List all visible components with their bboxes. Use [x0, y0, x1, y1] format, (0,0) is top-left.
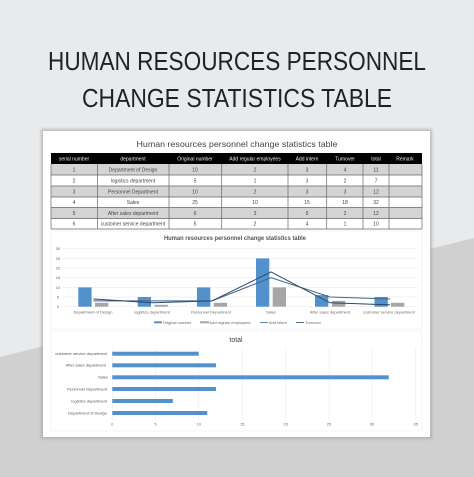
value axis labels: 35 — [413, 422, 419, 426]
table rows: 2 — [73, 178, 76, 184]
value axis labels — [111, 422, 419, 426]
background diagonal panel — [0, 238, 474, 477]
table rows: 10 — [373, 222, 379, 228]
x axis labels — [74, 310, 416, 314]
category labels: After sales department — [66, 363, 107, 368]
y axis labels: 5 — [57, 294, 60, 300]
category labels — [55, 351, 108, 415]
legend — [154, 320, 322, 325]
table header: Remark — [396, 156, 414, 162]
table header: Add intern — [296, 156, 319, 162]
paper shadow — [41, 129, 432, 439]
title: HUMAN RESOURCES PERSONNEL — [48, 46, 426, 76]
table rows: Personnel Department — [108, 190, 159, 196]
bars: add regular employees — [95, 287, 404, 307]
table rows: 6 — [194, 211, 197, 217]
value axis labels: 5 — [154, 422, 157, 426]
table rows: 11 — [373, 168, 379, 174]
table rows: 2 — [254, 168, 257, 174]
table rows: 2 — [344, 178, 347, 184]
total bar chart — [51, 331, 422, 431]
table header: department — [120, 156, 146, 162]
legend: Turnover — [305, 320, 322, 325]
y axis labels: 10 — [56, 285, 61, 290]
legend: Add intern — [269, 320, 287, 325]
x axis labels: customer service department — [363, 310, 416, 314]
value axis labels: 10 — [196, 422, 202, 426]
title — [48, 46, 426, 113]
table header — [59, 156, 414, 162]
table rows: 7 — [375, 178, 378, 184]
category labels: customer service department — [55, 351, 108, 356]
table rows: 5 — [194, 222, 197, 228]
spreadsheet sheet — [43, 131, 430, 437]
table rows: 3 — [306, 178, 309, 184]
value axis labels: 25 — [327, 422, 332, 426]
table rows: 1 — [73, 168, 76, 174]
y axis labels: 30 — [56, 246, 61, 251]
x axis labels: After sales department — [310, 310, 351, 314]
x axis labels: Personnel Department — [191, 310, 232, 314]
data table — [51, 153, 422, 229]
table rows: 3 — [306, 190, 309, 196]
line: turnover — [94, 272, 390, 305]
table rows — [73, 168, 379, 228]
combo chart — [51, 231, 422, 329]
category labels: Personnel Department — [67, 386, 108, 391]
table rows: 25 — [192, 200, 198, 206]
table rows: 3 — [306, 168, 309, 174]
table rows: 3 — [254, 211, 257, 217]
value axis labels: 20 — [283, 422, 289, 426]
horizontal bars — [112, 352, 389, 415]
category labels: Department of Design — [68, 410, 107, 415]
total chart title: total — [229, 337, 243, 344]
x axis labels: logistics department — [134, 310, 171, 314]
table rows: 4 — [344, 168, 347, 174]
y axis labels: 0 — [57, 304, 60, 309]
table rows: 2 — [254, 190, 257, 196]
table rows: 10 — [192, 190, 198, 196]
y axis labels: 20 — [56, 266, 61, 270]
table rows: 5 — [73, 211, 76, 217]
table rows: 5 — [194, 178, 197, 184]
table header: Original number — [177, 156, 213, 162]
table rows: 1 — [254, 178, 257, 184]
value axis labels: 30 — [370, 422, 375, 426]
table rows: customer service department — [101, 222, 166, 228]
value axis labels: 0 — [111, 422, 114, 426]
table rows: Sales — [127, 200, 140, 206]
table rows: 6 — [73, 222, 76, 228]
table rows: 12 — [373, 190, 379, 196]
x axis labels: Sales — [266, 310, 276, 314]
table rows: Department of Design — [109, 168, 158, 174]
table rows: 5 — [306, 211, 309, 217]
table header: Add regular employees — [229, 156, 281, 162]
bars: original number — [78, 258, 388, 307]
y axis labels: 25 — [56, 256, 61, 261]
table rows: 3 — [344, 190, 347, 196]
category labels: Sales — [98, 375, 108, 380]
table header: serial number — [59, 156, 89, 162]
table rows: 3 — [73, 190, 76, 196]
table rows: logistics department — [111, 178, 156, 184]
category labels: logistics department — [71, 398, 108, 403]
legend: Add regular employees — [209, 320, 251, 325]
table rows: 15 — [304, 200, 310, 206]
table header: Turnover — [335, 156, 355, 162]
line: add intern — [94, 278, 390, 301]
y axis labels — [56, 246, 61, 309]
table rows: 4 — [306, 222, 309, 228]
table rows: 2 — [344, 211, 347, 217]
combo chart title: Human resources personnel change statistics table — [164, 235, 306, 242]
value axis labels: 15 — [240, 422, 245, 426]
table header: total — [371, 156, 381, 162]
table rows: 4 — [73, 200, 76, 206]
legend: Original number — [163, 320, 192, 325]
y axis labels: 15 — [56, 275, 61, 280]
sheet heading: Human resources personnel change statistics table — [136, 139, 338, 149]
table rows: 18 — [342, 200, 348, 206]
table rows: 2 — [254, 222, 257, 228]
x axis labels: Department of Design — [74, 310, 112, 314]
table rows: 1 — [344, 222, 347, 228]
title: CHANGE STATISTICS TABLE — [82, 83, 392, 113]
table rows: After sales department — [108, 211, 159, 217]
table rows: 12 — [373, 211, 379, 217]
table rows: 10 — [252, 200, 258, 206]
table rows: 10 — [192, 168, 198, 174]
table rows: 32 — [373, 200, 379, 206]
